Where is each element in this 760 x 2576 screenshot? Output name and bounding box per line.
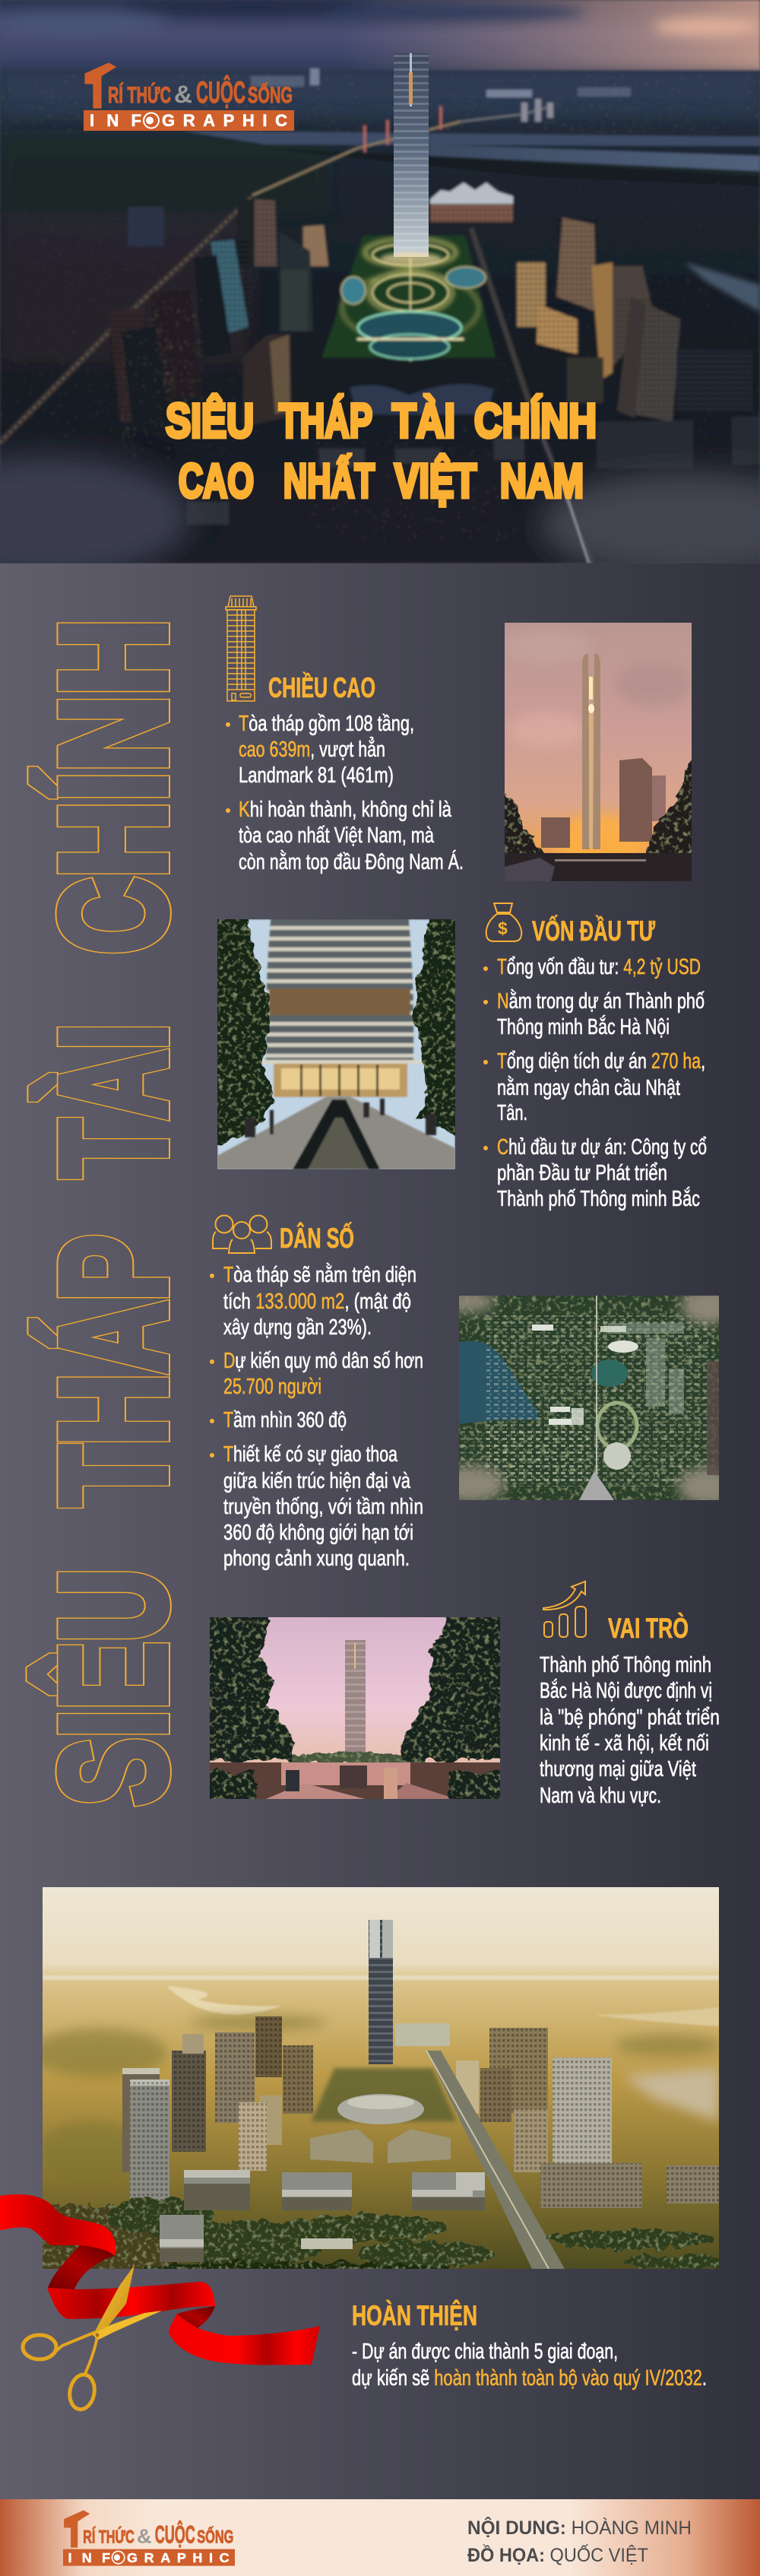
- heading: DÂN SỐ: [280, 1222, 354, 1254]
- photo: tower over water at dusk: [210, 1617, 500, 1799]
- vertical outline lettering: TÀI: [30, 1023, 197, 1178]
- title: SIÊU: [166, 394, 254, 448]
- bullets: Tòa tháp gồm 108 tầng,: [239, 712, 414, 736]
- bullets: Tổng diện tích dự án 270 ha,: [497, 1049, 705, 1074]
- footer band: [0, 2499, 760, 2576]
- bullets: Nằm trong dự án Thành phố: [497, 989, 705, 1014]
- main tower: [381, 53, 442, 265]
- bullets: phong cảnh xung quanh.: [223, 1547, 410, 1571]
- icon: people: [213, 1215, 271, 1253]
- panel: vai trò: [540, 1581, 720, 1808]
- bridge: [252, 122, 461, 195]
- title: CHÍNH: [474, 395, 597, 448]
- photo: golden aerial view of the complex: [30, 1887, 745, 2277]
- heading: VAI TRÒ: [608, 1612, 689, 1644]
- river: [182, 131, 760, 146]
- bullets: còn nằm top đầu Đông Nam Á.: [239, 850, 464, 874]
- roads: [0, 198, 251, 443]
- bullets: [210, 1263, 423, 1571]
- title: CAO: [179, 455, 254, 508]
- body text: thương mại giữa Việt: [540, 1757, 696, 1781]
- vertical outline lettering: SIÊU: [30, 1569, 197, 1806]
- body text: Thành phố Thông minh: [540, 1653, 711, 1677]
- footer credits: [467, 2516, 692, 2566]
- footer logo: GRAPHIC: [127, 2550, 230, 2565]
- bullets: tích 133.000 m2, (mật độ: [223, 1290, 411, 1314]
- body text: - Dự án được chia thành 5 giai đoạn,: [352, 2340, 618, 2364]
- congress building: [350, 384, 494, 414]
- bullets: nằm ngay chân cầu Nhật: [497, 1076, 680, 1100]
- page background: [0, 563, 760, 2576]
- title: VIỆT: [394, 454, 477, 508]
- icon: growth chart: [543, 1581, 586, 1637]
- logo: Tri thức & Cuộc sống Infographic: [84, 63, 294, 131]
- bullets: Thiết kế có sự giao thoa: [223, 1442, 397, 1467]
- icon: money bag: $: [498, 918, 508, 938]
- hero photo: aerial night view of the tower: [0, 0, 760, 578]
- bullets: Tầm nhìn 360 độ: [223, 1408, 347, 1432]
- gold scissors: [23, 2265, 162, 2411]
- bullets: Tân.: [497, 1101, 527, 1125]
- panel: chiều cao: [226, 596, 464, 874]
- dome: [430, 199, 513, 222]
- bullets: 25.700 người: [223, 1375, 321, 1399]
- bullets: Khi hoàn thành, không chỉ là: [239, 798, 451, 822]
- bullets: Dự kiến quy mô dân số hơn: [223, 1349, 423, 1373]
- bullets: 360 độ không giới hạn tới: [223, 1521, 413, 1545]
- bullets: tòa cao nhất Việt Nam, mà: [239, 823, 434, 848]
- vertical outline lettering: [30, 619, 197, 1806]
- bullets: Thành phố Thông minh Bắc: [497, 1187, 700, 1211]
- bullets: Landmark 81 (461m): [239, 763, 394, 788]
- title: THÁP: [279, 395, 372, 448]
- vertical outline lettering: THÁP: [30, 1235, 197, 1506]
- bullets: [226, 712, 464, 874]
- bullets: phần Đầu tư Phát triển: [497, 1161, 667, 1185]
- logo: Tri thức & Cuộc sống Infographic: GRAPHIC: [162, 111, 287, 130]
- footer logo: [63, 2511, 235, 2566]
- river: [167, 1986, 281, 2015]
- vertical outline lettering: TÀI: [30, 1023, 197, 1178]
- bullets: [483, 955, 707, 1211]
- ribbon and scissors: [0, 2194, 320, 2411]
- left towers: [122, 2016, 313, 2201]
- fog: [0, 456, 190, 578]
- logo: Tri thức & Cuộc sống Infographic: SỐNG: [248, 82, 293, 108]
- title: NHẤT: [283, 454, 375, 508]
- bullets: giữa kiến trúc hiện đại và: [223, 1469, 410, 1493]
- photo: aerial masterplan: [459, 1296, 719, 1500]
- city lights: [0, 76, 760, 133]
- bullets: truyền thống, với tầm nhìn: [223, 1495, 423, 1519]
- photo: tower at sunset: [505, 623, 692, 881]
- footer logo: INF: [68, 2550, 110, 2565]
- logo: Tri thức & Cuộc sống Infographic: RÍ THỨC: [108, 82, 171, 108]
- bullets: Tòa tháp sẽ nằm trên diện: [223, 1263, 416, 1287]
- vertical outline lettering: CHÍNH: [30, 619, 197, 954]
- park with lights: [322, 236, 496, 357]
- footer logo: SỐNG: [197, 2526, 233, 2547]
- footer logo: CUỘC: [155, 2519, 195, 2548]
- icon: tower: [226, 596, 256, 701]
- body text: là "bệ phóng" phát triển: [540, 1705, 720, 1730]
- heading: HOÀN THIỆN: [352, 2299, 477, 2331]
- bullets: Tổng vốn đầu tư: 4,2 tỷ USD: [497, 955, 701, 979]
- title: [166, 394, 597, 508]
- logo: Tri thức & Cuộc sống Infographic: INF: [90, 111, 141, 130]
- red ribbon: [0, 2194, 320, 2365]
- logo: Tri thức & Cuộc sống Infographic: &: [174, 81, 192, 108]
- body text: [352, 2340, 707, 2390]
- panel: vốn đầu tư: [483, 903, 707, 1211]
- footer credits: ĐỒ HỌA: QUỐC VIỆT: [467, 2543, 648, 2566]
- footer credits: NỘI DUNG: HOÀNG MINH: [467, 2516, 692, 2539]
- heading: CHIỀU CAO: [268, 672, 375, 703]
- vertical outline lettering: CHÍNH: [30, 619, 197, 954]
- low-rise and trees: [43, 2196, 719, 2269]
- footer logo: RÍ THỨC: [83, 2526, 135, 2547]
- bullets: cao 639m, vượt hẳn: [239, 737, 385, 762]
- center: [395, 2023, 450, 2046]
- buildings right: [556, 217, 597, 312]
- vertical outline lettering: THÁP: [30, 1235, 197, 1506]
- bullets: xây dựng gần 23%).: [223, 1315, 372, 1340]
- photo: tower podium with water channel: [210, 912, 463, 1169]
- icon: money bag: [486, 903, 521, 941]
- buildings back left: [128, 207, 164, 246]
- footer logo: &: [137, 2524, 152, 2547]
- vertical outline lettering: SIÊU: [30, 1569, 197, 1806]
- body text: [540, 1653, 720, 1808]
- panel: dân số: [210, 1215, 423, 1571]
- title: NAM: [500, 455, 584, 508]
- panel: hoàn thiện: [352, 2299, 707, 2390]
- title: TÀI: [392, 395, 455, 448]
- body text: kinh tế - xã hội, kết nối: [540, 1731, 709, 1756]
- right towers: [456, 2028, 719, 2208]
- logo: Tri thức & Cuộc sống Infographic: CUỘC: [196, 75, 245, 109]
- heading: VỐN ĐẦU TƯ: [532, 915, 655, 947]
- bullets: Thông minh Bắc Hà Nội: [497, 1015, 670, 1039]
- body text: Nam và khu vực.: [540, 1784, 661, 1808]
